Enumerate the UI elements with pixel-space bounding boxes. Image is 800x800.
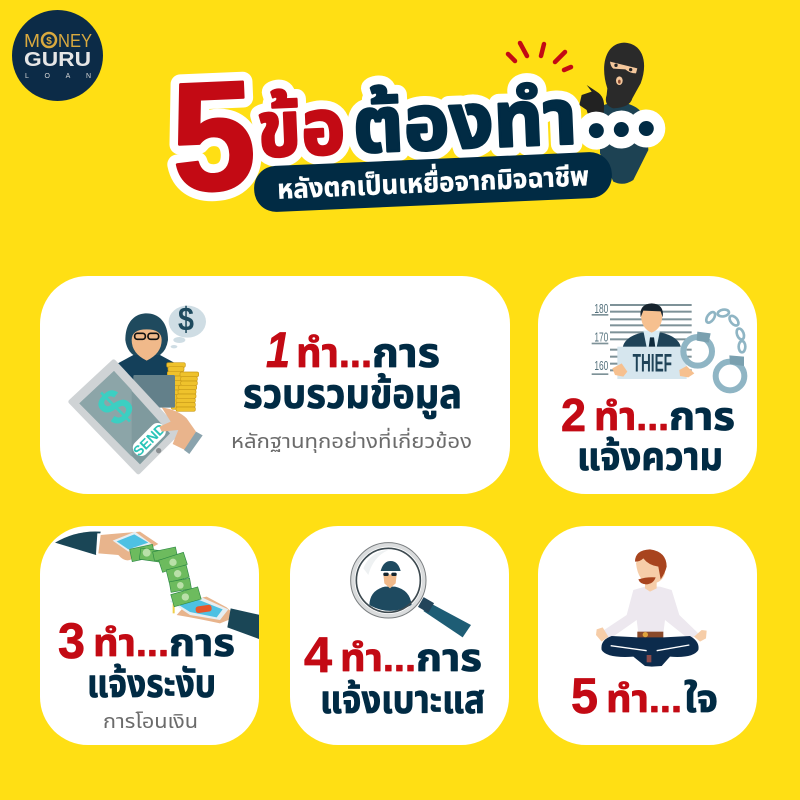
illustration: hacker with tablet: SEND <box>130 420 168 459</box>
heading: step 4: การ <box>416 638 482 680</box>
heading: step 1: การ <box>372 330 440 376</box>
subtitle banner: หลังตกเป็นเหยื่อจากมิจฉาชีพ <box>276 157 590 205</box>
logo: Money Guru Loan: M <box>24 31 40 51</box>
text: give a tip: แจ้งเบาะแส <box>320 679 485 722</box>
illustration: hacker with tablet: $ <box>178 301 194 338</box>
illustration: hacker with tablet <box>71 301 206 472</box>
panel 3: request transfer hold <box>40 526 260 745</box>
heading: step 5: ใจ <box>684 679 718 721</box>
title: 5 ข้อต้องทำ...: ข้อ <box>255 82 347 174</box>
heading: step 3: การ <box>169 623 235 665</box>
logo: Money Guru Loan: $ <box>46 36 52 47</box>
illustration: magnifying glass on suspect <box>351 543 471 637</box>
panel 1: gather information <box>40 276 510 494</box>
text: gather information: รวบรวมข้อมูล <box>243 371 462 419</box>
title: 5 ข้อต้องทำ...: 5 <box>168 48 259 224</box>
logo: Money Guru Loan <box>12 10 103 101</box>
heading: step 3: ทำ... <box>93 623 169 665</box>
illustration: hacker with tablet: $ <box>86 377 145 437</box>
title: 5 ข้อต้องทำ...: ต้องทำ <box>351 72 579 170</box>
heading: step 2: การ <box>669 396 735 439</box>
panel 4: report a tip <box>290 526 509 745</box>
heading: step 4: ทำ... <box>340 638 416 680</box>
panel 5: calm your mind <box>538 526 757 745</box>
text: all related evidence: หลักฐานทุกอย่างที่เกี่ยวข้อง <box>231 427 472 453</box>
heading: step 3 <box>58 613 235 669</box>
icon: burglar in balaclava <box>579 43 648 184</box>
illustration: thief mugshot with handcuffs: THIEF <box>633 350 672 378</box>
illustration: thief mugshot with handcuffs: 160 <box>594 359 608 373</box>
heading: step 3: 3 <box>58 613 85 669</box>
heading: step 1: 1 <box>266 322 290 378</box>
title: 5 ข้อต้องทำ... <box>168 31 658 224</box>
heading: step 5: ทำ... <box>606 679 682 721</box>
heading: step 2: 2 <box>561 389 586 441</box>
illustration: meditating man <box>596 549 707 667</box>
title: 5 ข้อต้องทำ...: ต้องทำ <box>351 72 579 170</box>
heading: step 5: 5 <box>571 668 598 724</box>
logo: Money Guru Loan: NEY <box>58 31 92 51</box>
heading: step 4 <box>304 627 482 683</box>
panel 2: file a police report <box>538 276 757 494</box>
logo: Money Guru Loan: LOAN <box>25 73 91 80</box>
subtitle banner <box>253 151 613 213</box>
text: the money transfer: การโอนเงิน <box>103 711 198 733</box>
illustration: money transfer between phones <box>55 531 260 639</box>
heading: step 5 <box>571 668 718 724</box>
title: 5 ข้อต้องทำ...: ข้อ <box>255 82 347 174</box>
text: file a report: แจ้งความ <box>577 436 723 479</box>
title: 5 ข้อต้องทำ...: 5 <box>168 48 259 224</box>
icon: red emphasis rays <box>508 43 571 70</box>
illustration: thief mugshot with handcuffs <box>592 302 745 390</box>
illustration: thief mugshot with handcuffs: 170 <box>594 331 608 345</box>
illustration: thief mugshot with handcuffs: 180 <box>594 302 608 316</box>
heading: step 4: 4 <box>304 627 332 683</box>
heading: step 1 <box>266 322 440 378</box>
heading: step 2: ทำ... <box>594 396 669 439</box>
logo: Money Guru Loan: GURU <box>24 49 91 71</box>
heading: step 1: ทำ... <box>296 330 372 376</box>
heading: step 2 <box>561 389 735 441</box>
text: request hold: แจ้งระงับ <box>87 663 216 706</box>
